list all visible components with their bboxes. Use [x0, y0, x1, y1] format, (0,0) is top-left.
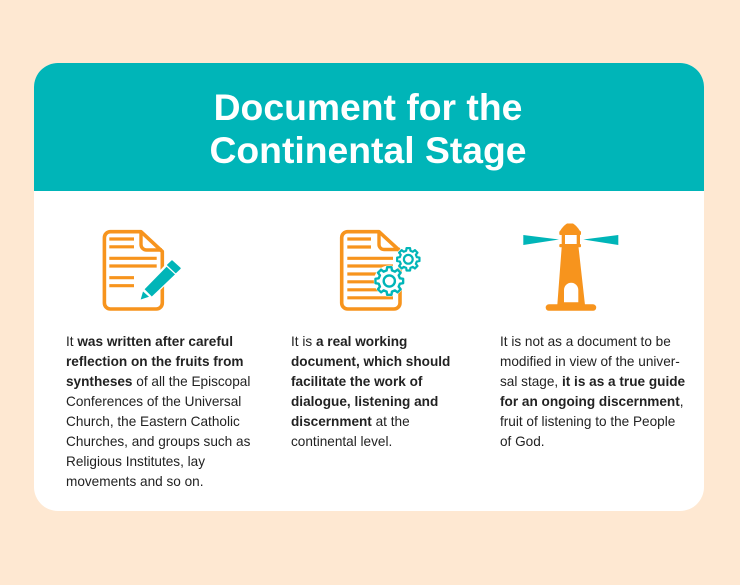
text block: column 2: discernment at the: [291, 414, 410, 429]
text block: column 1: Churches, and groups such as: [66, 434, 250, 449]
panel: card: [34, 63, 704, 511]
text block: column 1: Religious Institutes, lay: [66, 454, 205, 469]
text block: column 1: It was written after careful: [66, 334, 233, 349]
text block: column 2: dialogue, listening and: [291, 394, 438, 409]
text block: column 2: document, which should: [291, 354, 450, 369]
text block: column 2: It is a real working: [291, 334, 407, 349]
text block: column 3: for an ongoing discernment,: [500, 394, 684, 409]
header band: [34, 63, 704, 191]
text block: column 2: [291, 334, 450, 449]
text block: column 2: facilitate the work of: [291, 374, 422, 389]
icon: document with gears: [342, 232, 421, 309]
title: Continental Stage: [209, 129, 527, 171]
text block: column 1: syntheses of all the Episcopal: [66, 374, 250, 389]
icon: lighthouse: [523, 224, 618, 311]
title: [209, 86, 527, 171]
text block: column 3: fruit of listening to the People: [500, 414, 675, 429]
text block: column 3: It is not as a document to be: [500, 334, 671, 349]
icon: document with pencil: [104, 232, 180, 309]
text block: column 1: [66, 334, 250, 489]
title: Document for the: [214, 86, 522, 128]
text block: column 3: modified in view of the univer-: [500, 354, 680, 369]
icon: large gear: [374, 266, 405, 296]
text block: column 1: Conferences of the Universal: [66, 394, 241, 409]
text block: column 1: reflection on the fruits from: [66, 354, 243, 369]
text block: column 1: Church, the Eastern Catholic: [66, 414, 240, 429]
text block: column 1: movements and so on.: [66, 474, 204, 489]
text block: column 3: [500, 334, 685, 449]
text block: column 3: sal stage, it is as a true guide: [500, 374, 685, 389]
icon: small gear: [395, 246, 421, 272]
text block: column 2: continental level.: [291, 434, 392, 449]
text block: column 3: of God.: [500, 434, 545, 449]
